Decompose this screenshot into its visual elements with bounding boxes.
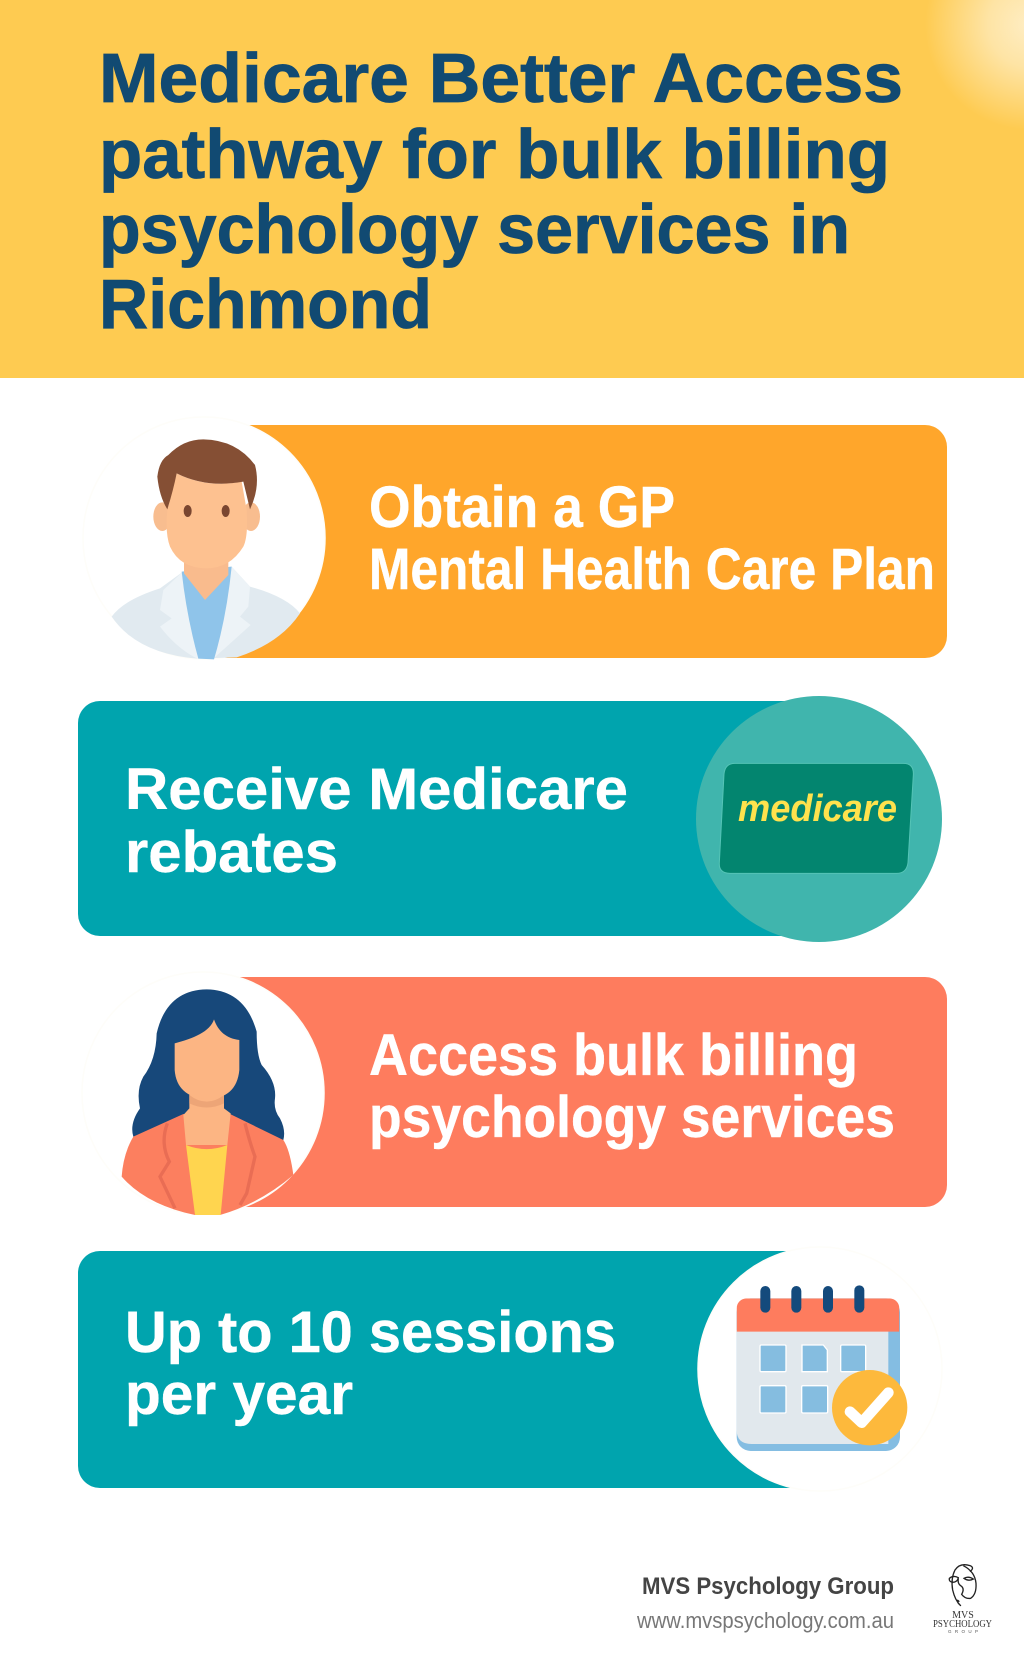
logo: MVS Psychology Group: MVS: [952, 1610, 974, 1621]
step 1 text: [369, 475, 935, 602]
footer contact text: www.mvspsychology.com.au: [636, 1608, 894, 1633]
title: [99, 39, 903, 343]
icon: calendar with check: [697, 1251, 908, 1488]
step 4 text: [125, 1300, 616, 1427]
step 1 text: Mental Health Care Plan: [369, 537, 935, 602]
header banner: [0, 0, 1024, 378]
step 2 text: Receive Medicare: [125, 757, 628, 822]
step 3 text: Access bulk billing: [369, 1023, 858, 1088]
step 2 text: rebates: [125, 820, 338, 885]
title: Medicare Better Access: [99, 39, 903, 117]
logo: MVS Psychology Group: [933, 1565, 992, 1634]
title: Richmond: [99, 265, 432, 343]
footer contact text: MVS Psychology Group: [642, 1573, 894, 1600]
panel: step 2 Medicare rebates: [78, 696, 942, 942]
footer contact text: [636, 1573, 894, 1633]
icon: medicare card: medicare: [738, 788, 897, 830]
step 4 text: per year: [125, 1362, 353, 1427]
title: pathway for bulk billing: [99, 115, 890, 193]
panel: step 3 bulk billing: [82, 972, 947, 1215]
step 3 text: [369, 1023, 895, 1150]
icon: doctor: [83, 417, 325, 659]
step 3 text: psychology services: [369, 1085, 895, 1150]
panel: step 4 ten sessions: [78, 1247, 942, 1491]
icon: medicare card: [696, 696, 942, 942]
logo: MVS Psychology Group: PSYCHOLOGY: [933, 1619, 992, 1630]
step 2 text: [125, 757, 628, 885]
logo: MVS Psychology Group: GROUP: [948, 1629, 978, 1634]
icon: psychologist woman: [82, 972, 324, 1215]
step 4 text: Up to 10 sessions: [125, 1300, 616, 1365]
step 1 text: Obtain a GP: [369, 475, 675, 540]
title: psychology services in: [99, 190, 850, 268]
panel: step 1 GP mental health care plan: [83, 417, 947, 659]
